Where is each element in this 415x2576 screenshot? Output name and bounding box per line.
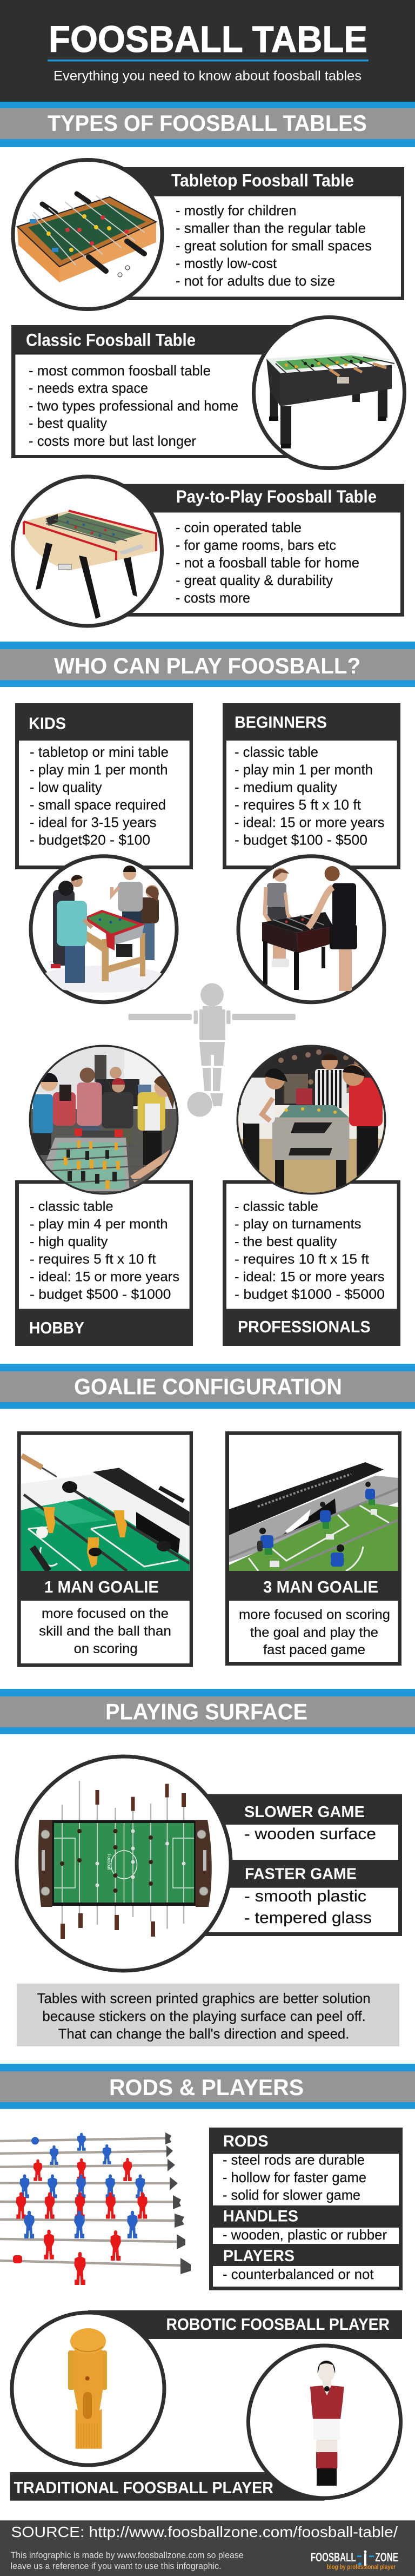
callout: screen printed graphics note: Tables with screen printed graphics are better solution (37, 1990, 371, 2006)
text block: classic features: - needs extra space (29, 380, 148, 396)
text block: tabletop features: - great solution for small spaces (176, 237, 372, 254)
panel: 3 man goalie: 3 MAN GOALIE (263, 1577, 378, 1596)
panel heading: 3 man goalie (229, 1571, 398, 1601)
panel heading: classic: Classic Foosball Table (26, 330, 196, 349)
footer (0, 2520, 415, 2576)
section heading: playing surface (0, 1689, 415, 1734)
panel: 1 man goalie: 1 MAN GOALIE (44, 1577, 159, 1596)
text block: hobby: - classic table (30, 1199, 113, 1214)
panel: classic foosball table (11, 317, 404, 468)
text block: 3 man goalie: more focused on scoring (239, 1607, 390, 1622)
header banner (0, 0, 415, 102)
callout: screen printed graphics note: That can change the ball's direction and speed. (58, 2025, 349, 2042)
text block: faster surfaces: - tempered glass (244, 1909, 372, 1927)
text block: beginners: - classic table (235, 744, 318, 760)
logo: foosball zone: blog by professional player (327, 2563, 396, 2571)
text: wooden surface: - wooden surface (244, 1825, 376, 1843)
credit text (11, 2550, 244, 2571)
text block: rods: - solid for slower game (223, 2187, 360, 2203)
panel: robotic foosball player (12, 2310, 402, 2465)
text block: beginners (235, 744, 385, 848)
panel heading: professionals: PROFESSIONALS (238, 1317, 371, 1336)
text block: kids (30, 744, 169, 848)
text block: tabletop features: - not for adults due to size (176, 273, 335, 289)
panel heading: beginners: BEGINNERS (235, 712, 327, 731)
text block: kids: - low quality (30, 779, 102, 795)
image: classic table (254, 317, 404, 468)
title: FOOSBALL TABLE (49, 18, 367, 60)
text block: pay-to-play features (176, 519, 359, 606)
text block: kids: - play min 1 per month (30, 762, 168, 778)
text block: professionals: - budget $1000 - $5000 (235, 1287, 385, 1302)
panel heading: pay-to-play: Pay-to-Play Foosball Table (176, 487, 377, 506)
image: table from above: Foosball (106, 1854, 112, 1870)
panel heading: kids: KIDS (29, 714, 66, 732)
text block: 1 man goalie: on scoring (74, 1641, 138, 1656)
text block: kids: - budget$20 - $100 (30, 832, 150, 848)
text block: beginners: - ideal: 15 or more years (235, 814, 385, 830)
text block: 1 man goalie: skill and the ball than (39, 1624, 171, 1639)
text block: rods (223, 2152, 366, 2203)
section heading: types of foosball tables: TYPES OF FOOSBALL TABLES (48, 110, 367, 136)
text block: tabletop features: - mostly low-cost (176, 255, 277, 272)
text block: faster surfaces: - smooth plastic (244, 1887, 366, 1905)
heading: slower game: SLOWER GAME (244, 1804, 365, 1821)
image: tabletop table (13, 160, 162, 309)
image: rods with blue and red players (0, 2132, 191, 2285)
section heading: goalie configuration: GOALIE CONFIGURATION (74, 1374, 342, 1399)
text block: 3 man goalie: fast paced game (263, 1642, 365, 1657)
text block: professionals: - ideal: 15 or more years (235, 1270, 385, 1285)
panel: traditional foosball player (10, 2346, 401, 2501)
text block: classic features: - most common foosball table (29, 362, 211, 379)
text block: professionals (235, 1199, 385, 1302)
heading: faster game: FASTER GAME (245, 1866, 357, 1883)
icon: foosball player figure (129, 983, 296, 1117)
image: table from above (17, 1756, 231, 1971)
text block: tabletop features (176, 202, 372, 289)
text block: classic features (29, 362, 238, 449)
panel: 3 man goalie (225, 1431, 401, 1666)
text block: faster surfaces (244, 1887, 372, 1927)
image: professional players photo: BC (363, 1122, 379, 1134)
text block: tabletop features: - mostly for children (176, 202, 296, 219)
text block: beginners: - requires 5 ft x 10 ft (235, 797, 362, 813)
section heading: rods and players: RODS & PLAYERS (109, 2075, 304, 2100)
heading: players: PLAYERS (223, 2247, 294, 2265)
image: professional players photo (238, 1047, 386, 1195)
panel: kids (15, 703, 193, 1002)
text block: 1 man goalie (39, 1606, 171, 1656)
heading: rods: RODS (223, 2132, 269, 2150)
panel: game speed by surface (162, 1794, 402, 1936)
panel: tabletop foosball table (13, 160, 404, 309)
panel heading: traditional: TRADITIONAL FOOSBALL PLAYER (14, 2478, 273, 2497)
panel: professionals (223, 1047, 400, 1346)
text block: hobby: - high quality (30, 1234, 108, 1250)
callout: screen printed graphics note (17, 1984, 399, 2046)
text block: tabletop features: - smaller than the regular table (176, 220, 366, 236)
text block: professionals: - classic table (235, 1199, 318, 1214)
credit text: leave us a reference if you want to use this infographic. (11, 2561, 222, 2571)
text block: pay-to-play features: - not a foosball table for home (176, 554, 359, 571)
image: robotic yellow player (12, 2313, 164, 2465)
panel: beginners (223, 703, 400, 1002)
panel heading: robotic: ROBOTIC FOOSBALL PLAYER (166, 2315, 390, 2334)
section heading: rods and players (0, 2064, 415, 2109)
text: players: - counterbalanced or not (223, 2266, 374, 2282)
text block: pay-to-play features: - coin operated table (176, 519, 302, 536)
image: traditional red player (249, 2346, 401, 2498)
logo: foosball zone (311, 2550, 398, 2571)
subtitle: Everything you need to know about foosball tables (53, 68, 362, 83)
text block: beginners: - medium quality (235, 779, 337, 795)
section heading: types of foosball tables (0, 102, 415, 147)
section heading: who can play foosball (0, 642, 415, 687)
text block: pay-to-play features: - great quality & durability (176, 572, 333, 588)
image: 3 man goalie table (229, 1462, 398, 1571)
text: handles: - wooden, plastic or rubber (223, 2227, 387, 2243)
panel: hobby (15, 1047, 193, 1346)
text block: rods: - hollow for faster game (223, 2169, 366, 2185)
text block: pay-to-play features: - costs more (176, 590, 250, 606)
panel heading: 1 man goalie (21, 1571, 190, 1601)
credit text: This infographic is made by www.foosballzone.com so please (11, 2550, 244, 2560)
text block: professionals: - the best quality (235, 1234, 337, 1250)
heading: handles: HANDLES (223, 2208, 298, 2225)
logo: foosball zone: FOOSBALL (311, 2550, 356, 2564)
text block: pay-to-play features: - for game rooms, bars etc (176, 537, 336, 553)
panel: 1 man goalie (17, 1431, 193, 1667)
text block: professionals: - requires 10 ft x 15 ft (235, 1252, 369, 1267)
panel: pay-to-play foosball table (13, 477, 404, 626)
image: pay-to-play table (13, 477, 162, 626)
callout: screen printed graphics note: because stickers on the playing surface can peel off. (42, 2008, 366, 2024)
text block: hobby: - budget $500 - $1000 (30, 1287, 171, 1302)
image: kids playing (31, 856, 177, 1002)
logo: foosball zone: ZONE (375, 2550, 398, 2564)
text block: classic features: - two types professional and home (29, 398, 238, 414)
text block: hobby (30, 1199, 179, 1302)
image: hobby players photo (30, 1047, 178, 1195)
text block: classic features: - best quality (29, 415, 107, 431)
text block: kids: - tabletop or mini table (30, 744, 169, 760)
text block: professionals: - play on turnaments (235, 1217, 361, 1232)
panel: rods, handles, players (209, 2128, 403, 2290)
text block: hobby: - ideal: 15 or more years (30, 1270, 179, 1285)
text block: beginners: - play min 1 per month (235, 762, 373, 778)
text block: classic features: - costs more but last longer (29, 433, 196, 449)
text block: 1 man goalie: more focused on the (42, 1606, 169, 1621)
section heading: goalie configuration (0, 1364, 415, 1409)
source url: SOURCE: http://www.foosballzone.com/foosball-table/ (11, 2524, 398, 2540)
text block: hobby: - requires 5 ft x 10 ft (30, 1252, 156, 1267)
image: beginners playing (238, 856, 384, 1002)
panel heading: tabletop: Tabletop Foosball Table (171, 170, 354, 190)
section heading: who can play foosball: WHO CAN PLAY FOOSBALL? (54, 653, 360, 678)
section heading: playing surface: PLAYING SURFACE (105, 1699, 307, 1725)
text block: rods: - steel rods are durable (223, 2152, 365, 2168)
panel heading: hobby: HOBBY (29, 1318, 84, 1337)
text block: kids: - ideal for 3-15 years (30, 814, 156, 830)
text block: beginners: - budget $100 - $500 (235, 832, 367, 848)
text block: hobby: - play min 4 per month (30, 1217, 168, 1232)
text block: 3 man goalie (239, 1607, 390, 1657)
text block: kids: - small space required (30, 797, 166, 813)
image: 1 man goalie table (21, 1456, 190, 1571)
text block: 3 man goalie: the goal and play the (250, 1625, 378, 1640)
